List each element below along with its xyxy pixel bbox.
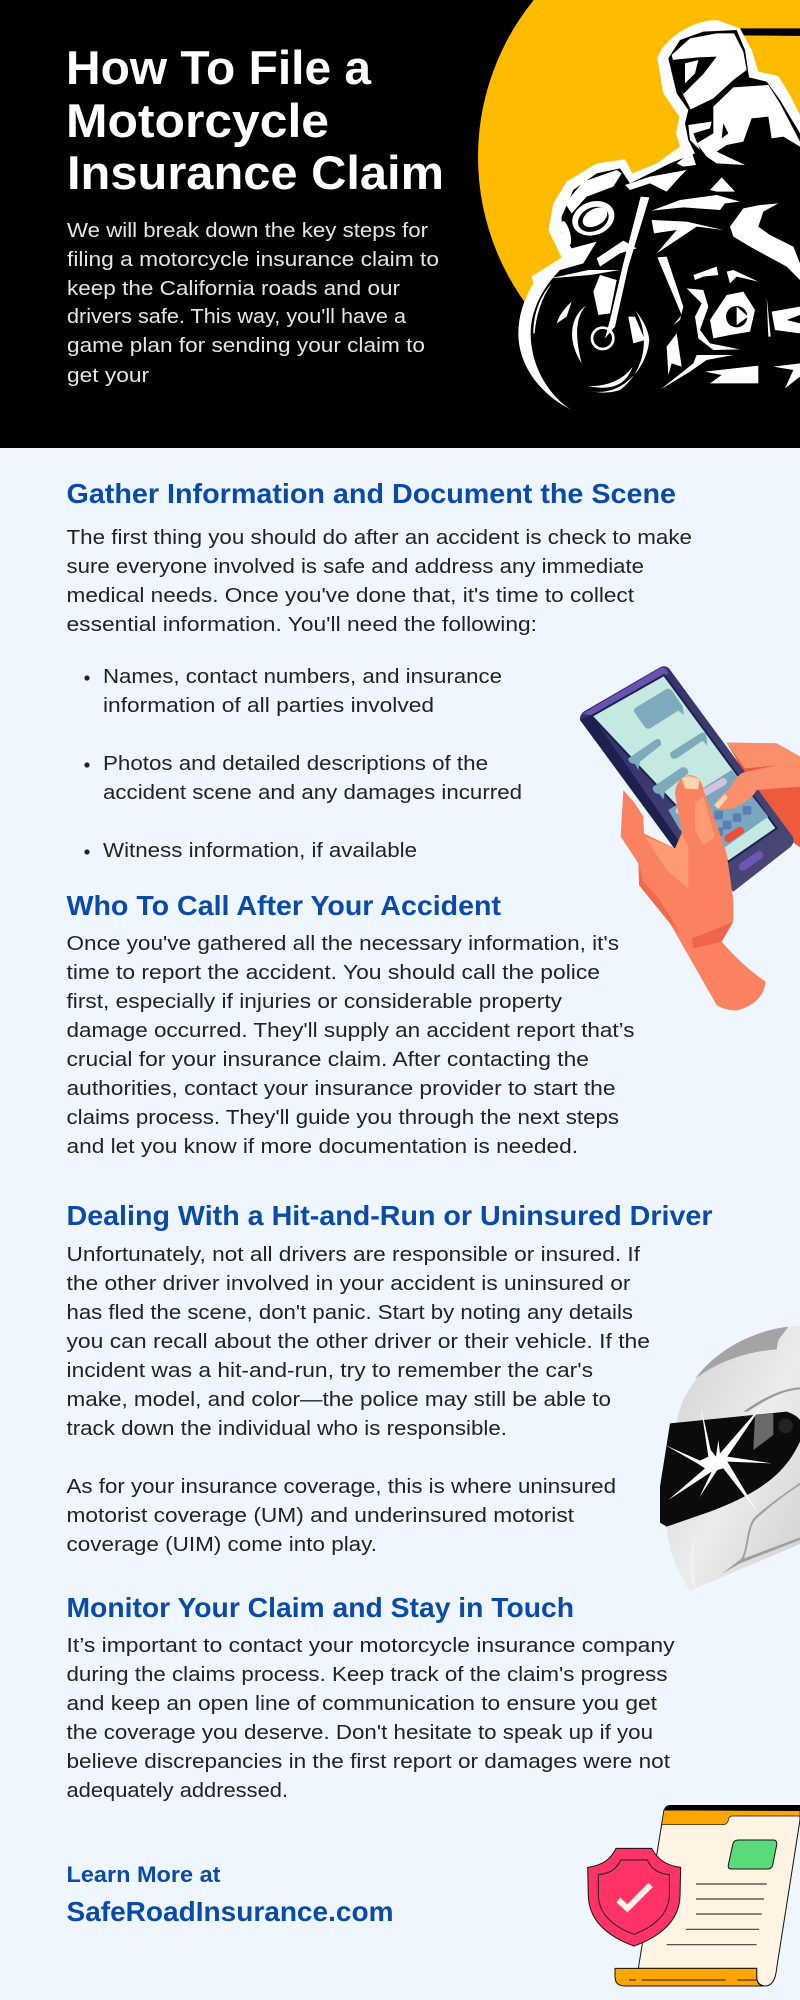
heading: gather information: Gather Information and Document the Scene [66,478,676,509]
text block: hit and run: track down the individual who is responsible. [66,1418,507,1440]
bullet list: Photos and detailed descriptions of the [103,753,488,775]
engine [693,267,718,280]
text block: hit and run: you can recall about the other driver or their vehicle. If the [66,1331,650,1353]
icon: cracked helmet [660,1326,800,1591]
fork [605,197,649,338]
title: How To File a [66,41,372,94]
title [66,41,444,199]
text block: insurance coverage: coverage (UIM) come into play. [66,1534,377,1556]
text block: gather information [66,527,692,636]
icon: yellow sun circle [478,0,800,302]
text block: monitor your claim: during the claims process. Keep track of the claim's progress [66,1664,668,1686]
icon: motorcycle rider [518,20,800,448]
seat [730,203,800,280]
call to action [66,1862,394,1927]
text block: gather information: medical needs. Once you've done that, it's time to collect [66,585,635,607]
text block: insurance coverage [66,1476,616,1556]
text block: hit and run: Unfortunately, not all drivers are responsible or insured. If [66,1244,640,1266]
icon: document and shield [588,1805,800,1986]
text block: who to call: Once you've gathered all the necessary information, it's [66,933,619,955]
title: Motorcycle [66,94,329,147]
text block: hit and run: make, model, and color—the police may still be able to [66,1389,611,1411]
text block: gather information: essential information. You'll need the following: [66,614,537,636]
text block: insurance coverage: motorist coverage (UM) and underinsured motorist [66,1505,574,1527]
tank and frame [652,195,740,211]
heading: monitor your claim: Monitor Your Claim and Stay in Touch [66,1592,574,1623]
text block: monitor your claim: believe discrepancies in the first report or damages were not [66,1751,670,1773]
text block: who to call [66,933,634,1158]
text block: who to call: and let you know if more documentation is needed. [66,1136,578,1158]
text block: who to call: time to report the accident. You should call the police [66,962,600,984]
bullet list: accident scene and any damages incurred [103,782,522,804]
text block: hit and run: has fled the scene, don't panic. Start by noting any details [66,1302,633,1324]
intro text: get your [67,365,149,387]
text block: hit and run: incident was a hit-and-run, try to remember the car's [66,1360,593,1382]
text block: insurance coverage: As for your insurance coverage, this is where uninsured [66,1476,616,1498]
intro text [67,220,439,387]
text block: monitor your claim: the coverage you deserve. Don't hesitate to speak up if you [66,1722,653,1744]
title: Insurance Claim [67,146,444,199]
text block: who to call: authorities, contact your insurance provider to start the [66,1078,616,1100]
text block: who to call: first, especially if injuries or considerable property [66,991,562,1013]
bullet list [84,666,522,862]
text block: monitor your claim: It’s important to contact your motorcycle insurance company [66,1635,674,1657]
helmet and rider details [672,33,747,109]
bullet list: information of all parties involved [103,695,434,717]
panel: black header [0,0,800,448]
text block: gather information: sure everyone involved is safe and address any immediate [66,556,644,578]
heading: hit and run: Dealing With a Hit-and-Run or Uninsured Driver [66,1200,713,1231]
text block: who to call: damage occurred. They'll supply an accident report that’s [66,1020,634,1042]
bike front and cowl [565,170,622,213]
icon: hands holding phone [580,666,800,1011]
text block: monitor your claim: adequately addressed. [66,1780,288,1802]
intro text: keep the California roads and our [67,278,400,300]
bullet list: Witness information, if available [103,840,417,862]
text block: who to call: crucial for your insurance claim. After contacting the [66,1049,589,1071]
heading: who to call: Who To Call After Your Accident [66,890,501,921]
call to action: SafeRoadInsurance.com [66,1896,394,1927]
text block: hit and run [66,1244,650,1440]
intro text: filing a motorcycle insurance claim to [67,249,439,271]
intro text: drivers safe. This way, you'll have a [67,306,407,328]
intro text: We will break down the key steps for [67,220,428,242]
text block: gather information: The first thing you should do after an accident is check to make [66,527,692,549]
text block: hit and run: the other driver involved in your accident is uninsured or [66,1273,631,1295]
call to action: Learn More at [66,1862,221,1887]
text block: monitor your claim [66,1635,674,1802]
intro text: game plan for sending your claim to [67,335,425,357]
text block: who to call: claims process. They'll guide you through the next steps [66,1107,619,1129]
text block: monitor your claim: and keep an open line of communication to ensure you get [66,1693,657,1715]
bullet list: Names, contact numbers, and insurance [103,666,502,688]
wheel details [592,328,613,349]
